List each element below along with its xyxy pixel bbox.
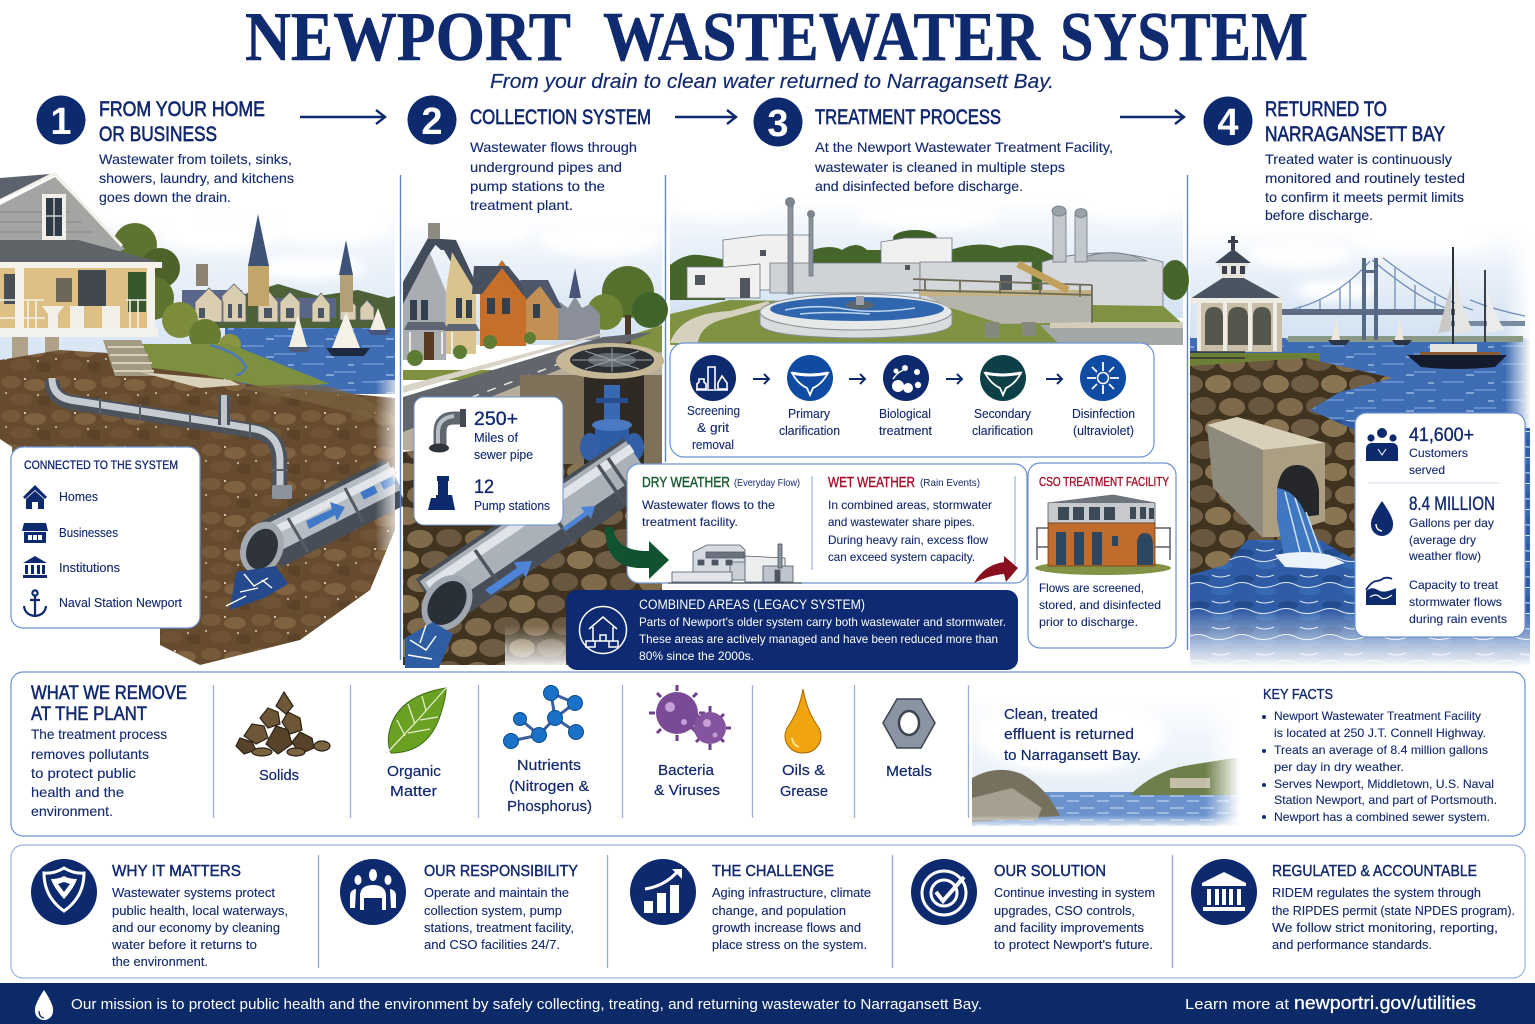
panel: collection stats: Miles of: [474, 430, 518, 445]
trees: [670, 230, 1189, 300]
heading: WHAT WE REMOVE: [31, 683, 187, 704]
key facts: per day in dry weather.: [1274, 760, 1404, 774]
sewer main: [226, 470, 395, 610]
buildings: [687, 198, 1163, 308]
label: screening: removal: [692, 437, 734, 452]
panel: CSO treatment facility: Flows are screened,: [1039, 581, 1144, 595]
panel: connected to the system: Homes: [59, 489, 98, 504]
label: secondary clarification: Secondary: [974, 406, 1031, 421]
step 3 text: and disinfected before discharge.: [815, 178, 1023, 194]
website link: [1185, 993, 1476, 1013]
dry weather text: [642, 498, 775, 529]
arrow 2 to 3: [675, 110, 736, 124]
why it matters: public health, local waterways,: [112, 903, 288, 918]
caption: clean effluent: to Narragansett Bay.: [1004, 747, 1141, 764]
illustration: street and collection pipe: [403, 215, 668, 670]
label: disinfection: Disinfection: [1072, 406, 1135, 421]
the challenge: change, and population: [712, 903, 846, 918]
panel: collection stats: [414, 397, 563, 525]
panel: treatment steps: [670, 343, 1154, 457]
icon: home: [23, 485, 47, 509]
wet weather text: In combined areas, stormwater: [828, 498, 992, 512]
label: nutrients: (Nitrogen &: [509, 778, 589, 795]
icon: pump: [428, 476, 455, 510]
label: oils and grease: [780, 762, 828, 800]
our responsibility: Operate and maintain the: [424, 885, 569, 900]
icon: primary clarification: [787, 355, 833, 401]
step 2 text: pump stations to the: [470, 178, 605, 194]
step 2 text: [470, 139, 637, 213]
label: screening: & grit: [697, 420, 729, 435]
panel: collection stats: 12: [474, 477, 494, 498]
our solution: and facility improvements: [994, 920, 1145, 935]
step 4 text: before discharge.: [1265, 207, 1373, 223]
panel: combined areas: COMBINED AREAS (LEGACY SYSTEM): [639, 597, 865, 612]
panel: connected to the system: Businesses: [59, 525, 118, 540]
the challenge: THE CHALLENGE: [712, 863, 834, 880]
panel: what we remove: [11, 672, 1525, 836]
icon: institution: [1191, 859, 1257, 925]
stone outfall: [1207, 417, 1345, 569]
our solution: upgrades, CSO controls,: [994, 903, 1135, 918]
step 3 number: [754, 98, 802, 146]
panel: CSO treatment facility: prior to discharge.: [1039, 615, 1138, 629]
description: to protect public: [31, 765, 136, 781]
step 3 number: 3: [767, 103, 789, 145]
heading: AT THE PLANT: [31, 704, 147, 725]
icon: solids: [236, 692, 330, 756]
description: removes pollutants: [31, 746, 149, 762]
key facts: Serves Newport, Middletown, U.S. Naval: [1274, 777, 1494, 791]
arrow 1 to 2: [300, 110, 385, 124]
panel: system stats: [1355, 413, 1525, 637]
website link: Learn more at: [1185, 996, 1290, 1013]
label: secondary clarification: clarification: [972, 423, 1033, 438]
label: primary clarification: [779, 406, 840, 438]
icon: business: [22, 523, 48, 543]
wet weather heading: (Rain Events): [920, 477, 980, 489]
step 4 number: [1204, 96, 1252, 146]
our responsibility: [424, 863, 578, 952]
panel: dry and wet weather: [605, 464, 1027, 583]
step 2 heading: COLLECTION SYSTEM: [470, 106, 651, 129]
icon: shield: [31, 859, 97, 925]
regulated and accountable: RIDEM regulates the system through: [1272, 885, 1481, 900]
step 1 number: 1: [50, 101, 72, 143]
panel: connected to the system: Institutions: [59, 560, 120, 575]
panel: collection stats: Pump stations: [474, 498, 550, 513]
our solution: Continue investing in system: [994, 885, 1155, 900]
icon: target check: [911, 859, 977, 925]
arrow 3 to 4: [1120, 110, 1184, 124]
label: organic matter: Organic: [387, 763, 442, 780]
illustration: outfall to the bay: [1190, 226, 1531, 668]
panel: system stats: served: [1409, 463, 1445, 477]
step 3 text: [814, 139, 1113, 194]
dry weather heading: [642, 475, 800, 491]
step 4 heading: NARRAGANSETT BAY: [1265, 123, 1445, 146]
panel: system stats: (average dry: [1409, 533, 1476, 547]
our solution: [994, 863, 1155, 952]
panel: system stats: during rain events: [1409, 612, 1507, 626]
why it matters: [111, 863, 288, 969]
the challenge: Aging infrastructure, climate: [712, 885, 871, 900]
why it matters: water before it returns to: [111, 937, 257, 952]
pump riser: [580, 385, 644, 475]
panel: CSO treatment facility: CSO TREATMENT FACILITY: [1039, 475, 1170, 489]
wet weather text: can exceed system capacity.: [828, 550, 975, 564]
icon: footer drop: [35, 990, 53, 1020]
step 4 heading: RETURNED TO: [1265, 98, 1387, 121]
the challenge: growth increase flows and: [712, 920, 861, 935]
our responsibility: collection system, pump: [424, 903, 562, 918]
step 1 text: [99, 151, 294, 205]
key facts: [1263, 686, 1497, 824]
title: WASTEWATER: [603, 0, 1041, 76]
step 1 heading: [99, 98, 265, 146]
icon: bacteria and viruses: [649, 685, 731, 750]
caption: clean effluent: Clean, treated: [1004, 706, 1098, 723]
our solution: OUR SOLUTION: [994, 863, 1106, 880]
icon: combined house: [580, 606, 626, 654]
label: biological treatment: [879, 406, 932, 438]
walkway: [913, 264, 1092, 338]
icon: leaf: [386, 688, 446, 754]
arrow: [1046, 374, 1062, 384]
label: organic matter: Matter: [390, 783, 437, 800]
step 4 text: [1265, 151, 1465, 223]
icon: CSO building: [1035, 495, 1171, 575]
subtitle: From your drain to clean water returned to Narragansett Bay.: [490, 71, 1054, 93]
row of houses: [403, 223, 562, 366]
website link: newportri.gov/utilities: [1294, 993, 1476, 1013]
panel: connected to the system: [11, 447, 200, 628]
label: bacteria and viruses: Bacteria: [658, 762, 715, 779]
why it matters: WHY IT MATTERS: [112, 863, 241, 880]
regulated and accountable: REGULATED & ACCOUNTABLE: [1272, 863, 1477, 880]
our solution: to protect Newport's future.: [994, 937, 1153, 952]
label: nutrients: [507, 757, 592, 815]
illustration: home and pipe to the sewer main: [0, 174, 400, 665]
description: environment.: [31, 803, 113, 819]
wet weather heading: WET WEATHER: [828, 475, 915, 491]
main pipe: [405, 448, 640, 668]
dry weather text: Wastewater flows to the: [642, 498, 775, 512]
panel: system stats: Customers: [1409, 446, 1468, 460]
icon: molecule: [504, 686, 584, 748]
panel: system stats: 41,600+: [1409, 425, 1474, 446]
step 3 text: At the Newport Wastewater Treatment Facility,: [815, 139, 1113, 155]
step 4 text: to confirm it meets permit limits: [1265, 189, 1464, 205]
label: secondary clarification: [972, 406, 1033, 438]
icon: disinfection: [1080, 355, 1126, 401]
step 4 text: monitored and routinely tested: [1265, 170, 1465, 186]
illustration: clean effluent: [972, 690, 1240, 830]
label: primary clarification: clarification: [779, 423, 840, 438]
arrow: dry weather flow: [605, 527, 669, 579]
panel: system stats: weather flow): [1408, 549, 1481, 563]
divider column lines: [400, 175, 1188, 660]
key facts: is located at 250 J.T. Connell Highway.: [1274, 726, 1486, 740]
panel: combined areas: Parts of Newport's older system carry both wastewater and stormwater.: [639, 615, 1006, 629]
bridge: [1285, 258, 1525, 316]
why it matters: Wastewater systems protect: [112, 885, 275, 900]
step 1 text: Wastewater from toilets, sinks,: [99, 151, 292, 167]
label: nutrients: Phosphorus): [507, 798, 592, 815]
label: screening: Screening: [687, 403, 740, 418]
pipe lateral: [52, 378, 292, 499]
icon: small plant: [668, 544, 802, 583]
step 1 heading: OR BUSINESS: [99, 123, 217, 146]
label: disinfection: (ultraviolet): [1073, 423, 1134, 438]
icon: institution: [23, 556, 47, 578]
description: The treatment process: [31, 726, 167, 742]
icon: oil drop: [785, 689, 821, 753]
our responsibility: stations, treatment facility,: [424, 920, 574, 935]
the challenge: [712, 863, 871, 952]
arrow: [849, 374, 865, 384]
icon: sewer pipe: [429, 409, 466, 452]
step 4 heading: [1265, 98, 1445, 146]
description: [31, 726, 167, 819]
step 3 text: wastewater is cleaned in multiple steps: [814, 159, 1065, 175]
arrow: [753, 374, 769, 384]
grounds: [670, 300, 1183, 345]
label: nutrients: Nutrients: [517, 757, 581, 774]
key facts: Newport Wastewater Treatment Facility: [1274, 709, 1481, 723]
panel: CSO treatment facility: stored, and disinfected: [1039, 598, 1161, 612]
dry weather text: treatment facility.: [642, 515, 738, 529]
title: SYSTEM: [1060, 0, 1308, 76]
why it matters: the environment.: [112, 954, 208, 969]
label: organic matter: [387, 763, 442, 800]
panel: connected to the system: CONNECTED TO THE SYSTEM: [24, 458, 178, 472]
dry weather heading: DRY WEATHER: [642, 475, 730, 491]
regulated and accountable: [1272, 863, 1515, 952]
label: biological treatment: Biological: [879, 406, 931, 421]
illustration: treatment plant: [670, 191, 1189, 345]
arrow: [946, 374, 962, 384]
step 2 text: treatment plant.: [470, 197, 573, 213]
panel: combined areas: 80% since the 2000s.: [639, 649, 754, 663]
panel: combined areas: [566, 590, 1018, 670]
mission statement: Our mission is to protect public health and the environment by safely collecting, treating, and returning wastewater to Narragansett Bay.: [71, 996, 982, 1013]
step 2 text: underground pipes and: [470, 159, 622, 175]
dry weather heading: (Everyday Flow): [734, 477, 800, 489]
step 4 text: Treated water is continuously: [1265, 151, 1452, 167]
regulated and accountable: the RIPDES permit (state NPDES program).: [1272, 903, 1515, 918]
step 1 heading: FROM YOUR HOME: [99, 98, 265, 121]
title: [245, 0, 1308, 76]
caption: clean effluent: [1004, 706, 1141, 764]
panel: connected to the system: Naval Station Newport: [59, 595, 182, 610]
arrow: wet weather overflow: [974, 556, 1018, 583]
icon: people: [340, 859, 406, 925]
icon: metal nut: [883, 699, 935, 748]
panel: system stats: 8.4 MILLION: [1409, 494, 1495, 515]
key facts: KEY FACTS: [1263, 686, 1333, 703]
step 2 text: Wastewater flows through: [470, 139, 637, 155]
step 1 text: showers, laundry, and kitchens: [99, 170, 294, 186]
step 2 number: 2: [421, 101, 443, 143]
regulated and accountable: and performance standards.: [1272, 937, 1432, 952]
wet weather text: and wastewater share pipes.: [828, 515, 975, 529]
icon: secondary clarification: [980, 355, 1026, 401]
label: disinfection: [1072, 406, 1135, 438]
icon: stormwater waves: [1366, 578, 1396, 605]
label: oils and grease: Oils &: [782, 762, 825, 779]
heading: [31, 683, 187, 725]
description: health and the: [31, 784, 124, 800]
panel: system stats: stormwater flows: [1409, 595, 1502, 609]
label: primary clarification: Primary: [788, 406, 830, 421]
panel: combined areas: These areas are actively managed and have been reduced more than: [639, 632, 998, 646]
icon: screening: [690, 355, 736, 401]
label: bacteria and viruses: [654, 762, 720, 799]
key facts: Station Newport, and part of Portsmouth.: [1274, 793, 1497, 807]
icon: biological treatment: [883, 355, 929, 401]
step 1 text: goes down the drain.: [99, 189, 231, 205]
the challenge: place stress on the system.: [712, 937, 867, 952]
circular clarifier: [760, 294, 952, 338]
regulated and accountable: We follow strict monitoring, reporting,: [1272, 920, 1498, 935]
house: [0, 174, 163, 365]
step 4 number: 4: [1217, 102, 1239, 144]
panel: system stats: Capacity to treat: [1409, 578, 1499, 592]
our responsibility: OUR RESPONSIBILITY: [424, 863, 578, 880]
title: NEWPORT: [245, 0, 571, 76]
label: solids: Solids: [259, 767, 299, 784]
step 1 number: [36, 96, 86, 144]
our responsibility: and CSO facilities 24/7.: [424, 937, 560, 952]
icon: water drop: [1371, 501, 1393, 536]
step 3 heading: TREATMENT PROCESS: [815, 106, 1001, 129]
caption: clean effluent: effluent is returned: [1004, 726, 1134, 743]
key facts: Treats an average of 8.4 million gallons: [1274, 743, 1488, 757]
key facts: Newport has a combined sewer system.: [1274, 810, 1490, 824]
panel: CSO treatment facility: [1028, 463, 1176, 648]
panel: collection stats: 250+: [474, 409, 518, 430]
icon: customers: [1366, 428, 1398, 461]
label: screening: [687, 403, 740, 452]
rocks: [1190, 358, 1393, 575]
why it matters: and our economy by cleaning: [112, 920, 280, 935]
label: metals: Metals: [886, 763, 932, 780]
panel: bottom messages: [11, 845, 1525, 978]
sailboats: [1328, 247, 1507, 369]
gazebo: [1190, 236, 1320, 368]
icon: anchor: [24, 590, 46, 616]
wet weather text: [828, 498, 992, 564]
wet weather text: During heavy rain, excess flow: [828, 533, 988, 547]
panel: collection stats: sewer pipe: [474, 447, 533, 462]
panel: system stats: Gallons per day: [1409, 516, 1494, 530]
footer bar: [0, 983, 1535, 1024]
label: bacteria and viruses: & Viruses: [654, 782, 720, 799]
label: oils and grease: Grease: [780, 783, 828, 800]
icon: rising chart: [630, 859, 696, 925]
step 2 number: [408, 96, 456, 144]
label: biological treatment: treatment: [879, 423, 932, 438]
